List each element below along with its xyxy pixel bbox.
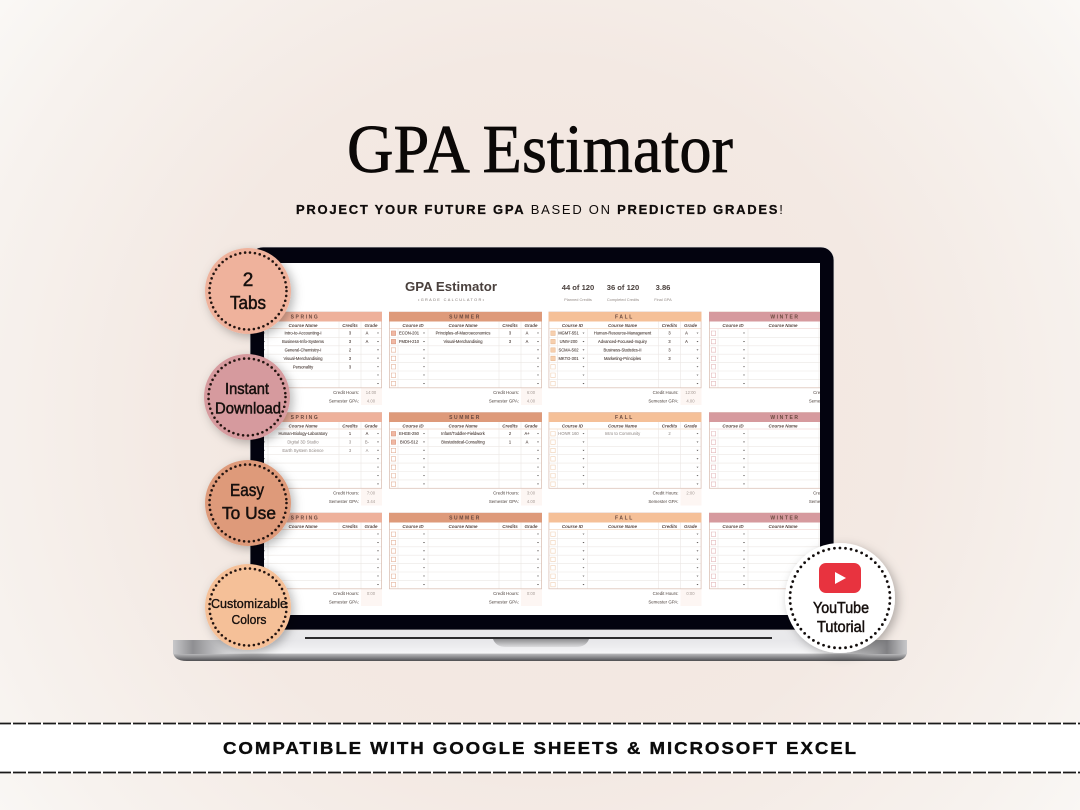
- table: fall 1: 3: [668, 339, 671, 344]
- table: summer 1: Course ID: [402, 323, 424, 328]
- table: summer 1: [389, 312, 542, 405]
- table: spring 2: 3.44: [367, 499, 376, 504]
- table: spring 1: 3: [349, 356, 352, 361]
- table: spring 1: Personality: [293, 364, 314, 369]
- summary stats: Final GPA: [654, 297, 672, 302]
- table: fall 3: Credit Hours:: [653, 591, 678, 596]
- badge: easy to use: [205, 460, 291, 546]
- table: fall 2: Intro to Community: [605, 431, 641, 436]
- table: summer 2: 1: [509, 440, 512, 445]
- table: summer 3: SUMMER: [449, 516, 481, 522]
- table: fall 1: A: [685, 331, 688, 336]
- title: GPA Estimator: [347, 111, 733, 187]
- badge: 2 tabs: 2: [243, 270, 253, 291]
- table: summer 1: Grade: [524, 323, 538, 328]
- table: fall 2: Grade: [684, 424, 697, 428]
- table: fall 1: Grade: [684, 323, 697, 328]
- sheet title: GPA Estimator: [405, 280, 497, 294]
- laptop bezel: [250, 247, 834, 630]
- table: fall 1: SCMA-502: [558, 348, 579, 352]
- badge: instant download: Instant: [225, 381, 270, 398]
- table: summer 3: Credits: [502, 524, 518, 529]
- table: summer 2: Infant/Toddler-Fieldwork: [441, 431, 486, 436]
- table: spring 2: A: [366, 448, 369, 453]
- table: spring 2: 3: [349, 448, 352, 453]
- table: spring 2: Earth System Science: [282, 448, 324, 453]
- table: spring 2: Digital 3D Studio: [287, 440, 319, 445]
- table: fall 3: [548, 513, 702, 606]
- table: fall 1: A: [685, 339, 688, 344]
- table: spring 2: 1: [349, 431, 352, 436]
- badge: customizable colors: Colors: [232, 612, 267, 627]
- summary stats: Completed Credits: [607, 297, 639, 302]
- badge: easy to use: To Use: [222, 503, 276, 523]
- table: summer 1: 6:00: [527, 390, 536, 395]
- table: summer 1: Principles-of-Macroeconomics: [436, 331, 490, 336]
- table: fall 1: 3: [668, 331, 671, 336]
- table: spring 2: A: [366, 431, 369, 436]
- table: summer 3: [389, 513, 542, 606]
- youtube label: YouTube: [813, 600, 869, 617]
- table: spring 1: Business-Info-Systems: [282, 339, 324, 344]
- bottom compatibility band: COMPATIBLE WITH GOOGLE SHEETS & MICROSOFT EXCEL: [223, 738, 858, 758]
- badge: customizable colors: [205, 564, 291, 650]
- table: fall 1: [548, 312, 702, 405]
- table: spring 2: Credit Hours:: [333, 490, 359, 496]
- table: fall 1: 3: [668, 348, 671, 352]
- icon: youtube play button: [819, 563, 861, 593]
- table: winter 1: Credit Hours:: [813, 390, 839, 395]
- table: spring 1: Credits: [342, 323, 358, 328]
- table: spring 1: 3: [349, 364, 352, 369]
- table: winter 3: [709, 512, 820, 590]
- table: fall 2: 2: [668, 431, 671, 436]
- table: fall 1: MKTG-301: [558, 356, 579, 361]
- table: summer 2: EHGE-250: [399, 431, 420, 436]
- table: spring 1: 3: [349, 339, 352, 344]
- table: spring 2: Grade: [364, 424, 378, 428]
- table: fall 1: Marketing-Principles: [604, 356, 641, 361]
- table: summer 2: [389, 412, 542, 506]
- table: winter 1: Course Name: [768, 323, 798, 328]
- table: spring 1: A: [366, 331, 369, 336]
- table: fall 2: [548, 412, 702, 506]
- table: fall 1: 4.00: [686, 398, 695, 404]
- table: spring 2: Human-Biology-Laboratory: [279, 431, 328, 436]
- table: spring 1: Intro-to-Accounting-I: [284, 331, 322, 336]
- table: summer 1: 4.00: [527, 398, 536, 404]
- table: spring 2: [264, 412, 382, 506]
- table: fall 1: MGMT-551: [558, 331, 579, 336]
- table: fall 1: 12:00: [685, 390, 696, 395]
- table: spring 1: 4.00: [367, 398, 376, 404]
- table: spring 1: Course Name: [288, 323, 318, 328]
- table: summer 2: A: [526, 440, 529, 445]
- table: spring 1: Credit Hours:: [333, 390, 359, 395]
- table: spring 3: Credits: [342, 524, 358, 529]
- table: spring 2: SPRING: [291, 415, 319, 421]
- table: fall 2: 2:00: [686, 490, 695, 496]
- table: fall 2: Credit Hours:: [653, 490, 678, 496]
- table: fall 3: Credits: [662, 524, 678, 529]
- summary stats: 36 of 120: [607, 283, 639, 292]
- laptop screen spreadsheet: [264, 263, 820, 615]
- table: spring 3: Semester GPA:: [329, 600, 359, 604]
- table: spring 1: 14:00: [366, 390, 377, 395]
- table: spring 2: B-: [365, 440, 370, 445]
- table: summer 2: Course Name: [448, 424, 478, 428]
- table: spring 2: Course Name: [288, 424, 318, 428]
- table: fall 2: FALL: [615, 415, 634, 421]
- table: fall 2: Credits: [662, 424, 678, 428]
- table: fall 1: Credit Hours:: [653, 390, 678, 395]
- table: winter 3: Course ID: [722, 524, 744, 529]
- youtube label: [813, 600, 869, 636]
- table: summer 2: Credit Hours:: [493, 490, 519, 496]
- table: winter 2: Course Name: [768, 424, 798, 428]
- table: winter 2: WINTER: [770, 415, 800, 421]
- table: summer 3: Course Name: [448, 524, 478, 529]
- table: summer 2: 2: [509, 431, 512, 436]
- table: summer 3: Grade: [524, 524, 538, 529]
- table: fall 2: HONR 160: [558, 431, 579, 436]
- table: summer 1: ECON-201: [399, 331, 420, 336]
- table: fall 3: Course ID: [562, 524, 584, 529]
- table: winter 2: [709, 412, 820, 503]
- table: fall 3: Grade: [684, 524, 697, 529]
- table: spring 1: [264, 312, 382, 405]
- table: spring 2: 3: [349, 440, 352, 445]
- sheet title: [406, 282, 497, 301]
- table: winter 2: Credit Hours:: [813, 490, 839, 496]
- table: spring 2: 7:00: [367, 490, 376, 496]
- table: summer 3: Course ID: [402, 524, 424, 529]
- table: fall 1: FALL: [615, 315, 634, 321]
- table: summer 1: Course Name: [448, 323, 478, 328]
- table: summer 1: A: [526, 331, 529, 336]
- bottom compatibility band: [0, 723, 1080, 773]
- table: fall 3: Course Name: [608, 524, 638, 529]
- table: winter 3: Course Name: [768, 524, 798, 529]
- table: spring 1: SPRING: [291, 315, 319, 321]
- table: spring 3: Grade: [364, 524, 378, 529]
- table: summer 2: Course ID: [402, 424, 424, 428]
- table: summer 2: Credits: [502, 424, 518, 428]
- table: spring 2: Credits: [342, 424, 358, 428]
- table: spring 1: 3: [349, 331, 352, 336]
- badge: customizable colors: Customizable: [211, 596, 287, 611]
- table: summer 3: Semester GPA:: [489, 600, 519, 604]
- table: summer 2: BIOS-512: [400, 440, 419, 445]
- table: winter 2: Course ID: [722, 424, 744, 428]
- table: summer 1: Credit Hours:: [493, 390, 519, 395]
- badge: instant download: Download: [215, 400, 281, 418]
- table: summer 2: 3:00: [527, 490, 536, 496]
- youtube label: Tutorial: [817, 619, 865, 636]
- badge: youtube tutorial: [785, 543, 895, 653]
- summary stats: [562, 283, 672, 302]
- table: summer 1: 3: [509, 331, 512, 336]
- table: spring 3: Course Name: [288, 524, 318, 529]
- table: spring 3: SPRING: [291, 516, 319, 522]
- table: spring 3: [264, 512, 382, 606]
- summary stats: Planned Credits: [564, 297, 592, 302]
- table: spring 1: Grade: [364, 323, 378, 328]
- table: summer 1: Visual-Merchandising: [443, 339, 483, 344]
- table: fall 1: Course Name: [608, 323, 638, 328]
- table: summer 2: A+: [524, 431, 530, 436]
- table: spring 1: A: [366, 339, 369, 344]
- table: fall 1: Credits: [662, 323, 678, 328]
- badge: instant download: [204, 354, 290, 440]
- table: spring 1: General-Chemistry-I: [285, 348, 321, 352]
- table: summer 3: Credit Hours:: [493, 591, 519, 596]
- summary stats: 3.86: [656, 283, 670, 292]
- table: summer 2: 4.00: [527, 499, 536, 504]
- table: summer 1: Credits: [502, 323, 518, 328]
- table: fall 3: Semester GPA:: [648, 600, 678, 604]
- badge: 2 tabs: [205, 248, 291, 334]
- table: fall 1: Semester GPA:: [648, 398, 678, 404]
- table: spring 2: Semester GPA:: [329, 499, 359, 504]
- table: winter 1: WINTER: [770, 315, 800, 321]
- table: winter 1: Semester GPA:: [809, 398, 839, 404]
- summary stats: 44 of 120: [562, 283, 594, 292]
- table: summer 2: Biostatistical-Consulting: [441, 440, 485, 445]
- table: summer 1: Semester GPA:: [489, 398, 519, 404]
- table: summer 1: 3: [509, 339, 512, 344]
- sheet title: •GRADE CALCULATOR•: [418, 297, 485, 302]
- table: spring 3: Credit Hours:: [333, 591, 359, 596]
- table: winter 2: Semester GPA:: [809, 499, 839, 504]
- table: summer 2: Semester GPA:: [489, 499, 519, 504]
- table: fall 1: Course ID: [562, 323, 584, 328]
- table: summer 1: A: [526, 339, 529, 344]
- table: spring 1: 2: [349, 348, 352, 352]
- table: summer 3: 0:00: [527, 591, 536, 596]
- table: fall 2: Course Name: [608, 424, 638, 428]
- badge: 2 tabs: Tabs: [230, 292, 266, 313]
- subtitle: PROJECT YOUR FUTURE GPA BASED ON PREDICTED GRADES!: [296, 202, 785, 217]
- table: fall 1: Advanced-Focused-Inquiry: [598, 339, 648, 344]
- table: fall 1: Business-Statistics-II: [604, 348, 642, 352]
- table: winter 3: WINTER: [770, 516, 800, 522]
- table: fall 2: Course ID: [562, 424, 584, 428]
- table: fall 1: UNIV-200: [560, 339, 578, 344]
- table: summer 1: FMDH-210: [399, 339, 420, 344]
- table: fall 3: FALL: [615, 516, 634, 522]
- table: spring 1: Semester GPA:: [329, 398, 359, 404]
- table: spring 3: 0:00: [367, 591, 376, 596]
- laptop: [173, 247, 907, 661]
- table: winter 1: [709, 312, 820, 402]
- table: winter 1: Course ID: [722, 323, 744, 328]
- laptop base: [173, 629, 907, 661]
- table: fall 1: 3: [668, 356, 671, 361]
- table: fall 3: 0:00: [686, 591, 695, 596]
- table: summer 1: SUMMER: [449, 315, 481, 321]
- badge: easy to use: Easy: [230, 480, 264, 500]
- table: summer 2: SUMMER: [449, 415, 481, 421]
- table: summer 2: Grade: [524, 424, 538, 428]
- table: spring 1: Visual-Merchandising: [283, 356, 323, 361]
- table: fall 2: Semester GPA:: [648, 499, 678, 504]
- table: fall 1: Human-Resource-Management: [594, 331, 652, 336]
